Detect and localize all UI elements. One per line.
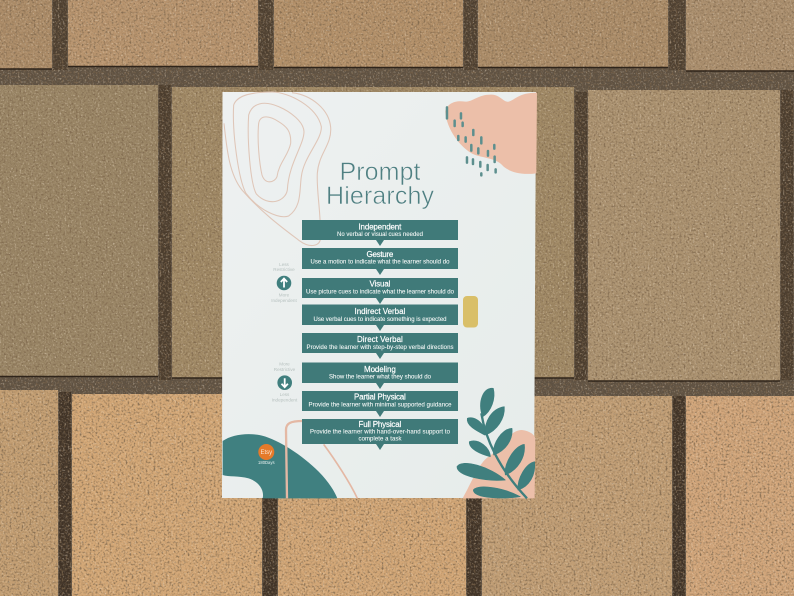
title: Prompt: [340, 158, 421, 186]
step: Indirect Verbal: Indirect Verbal: [354, 307, 406, 316]
etsy badge: Etsy: [260, 450, 272, 456]
step: Full Physical: [302, 419, 458, 450]
step: Partial Physical: Provide the learner with minimal supported guidance: [308, 402, 452, 408]
step: Independent: Independent: [358, 222, 402, 232]
up arrow key: Less: [279, 262, 290, 267]
step: Visual: Use picture cues to indicate what the learner should do: [306, 290, 455, 296]
step: Independent: No verbal or visual cues needed: [337, 232, 423, 238]
step: Modeling: Modeling: [364, 365, 396, 374]
pink lines over blob: [286, 421, 357, 498]
step: Direct Verbal: Direct Verbal: [357, 335, 403, 344]
step: Gesture: Gesture: [366, 250, 394, 259]
etsy badge: [258, 444, 275, 465]
up arrow key: Independent: [271, 298, 297, 303]
title: Hierarchy: [326, 182, 434, 210]
up arrow key: [271, 262, 297, 303]
step: Indirect Verbal: [302, 304, 458, 331]
step: Full Physical: Full Physical: [358, 420, 402, 429]
etsy badge: 180Days: [258, 460, 275, 465]
bottom left teal blob: [223, 434, 337, 498]
down arrow key: Restrictive: [274, 367, 296, 372]
step: Direct Verbal: Provide the learner with step-by-step verbal directions: [306, 345, 454, 351]
step: Independent: [302, 220, 458, 246]
step: Direct Verbal: [302, 333, 458, 359]
step: Gesture: Use a motion to indicate what the learner should do: [310, 260, 450, 266]
step: Modeling: [302, 362, 458, 389]
yellow sticky note: [463, 296, 478, 328]
down arrow key: Less: [280, 392, 290, 397]
step: Gesture: [302, 248, 458, 275]
step: Partial Physical: Partial Physical: [354, 392, 406, 402]
contour line decoration: [224, 92, 331, 246]
step: Modeling: Show the learner what they should do: [329, 375, 432, 381]
down arrow key: More: [279, 362, 290, 366]
title: [326, 158, 434, 210]
step: Visual: [302, 278, 458, 304]
pink blob top right: [445, 93, 537, 174]
poster sheet: [222, 92, 536, 498]
up arrow key: Restrictive: [273, 267, 295, 272]
up arrow key: More: [279, 292, 290, 298]
poster: [222, 92, 537, 498]
teal dash pattern: [447, 107, 496, 175]
fern plant: [457, 388, 535, 498]
step: Full Physical: Provide the learner with hand-over-hand support to: [310, 430, 451, 436]
step: Indirect Verbal: Use verbal cues to indicate something is expected: [314, 317, 446, 323]
step: Partial Physical: [302, 391, 458, 417]
bottom right pink shape: [463, 430, 535, 498]
step: Visual: Visual: [370, 280, 391, 288]
step: Full Physical: complete a task: [358, 437, 402, 443]
down arrow key: Independent: [272, 398, 298, 402]
down arrow key: [272, 362, 298, 402]
